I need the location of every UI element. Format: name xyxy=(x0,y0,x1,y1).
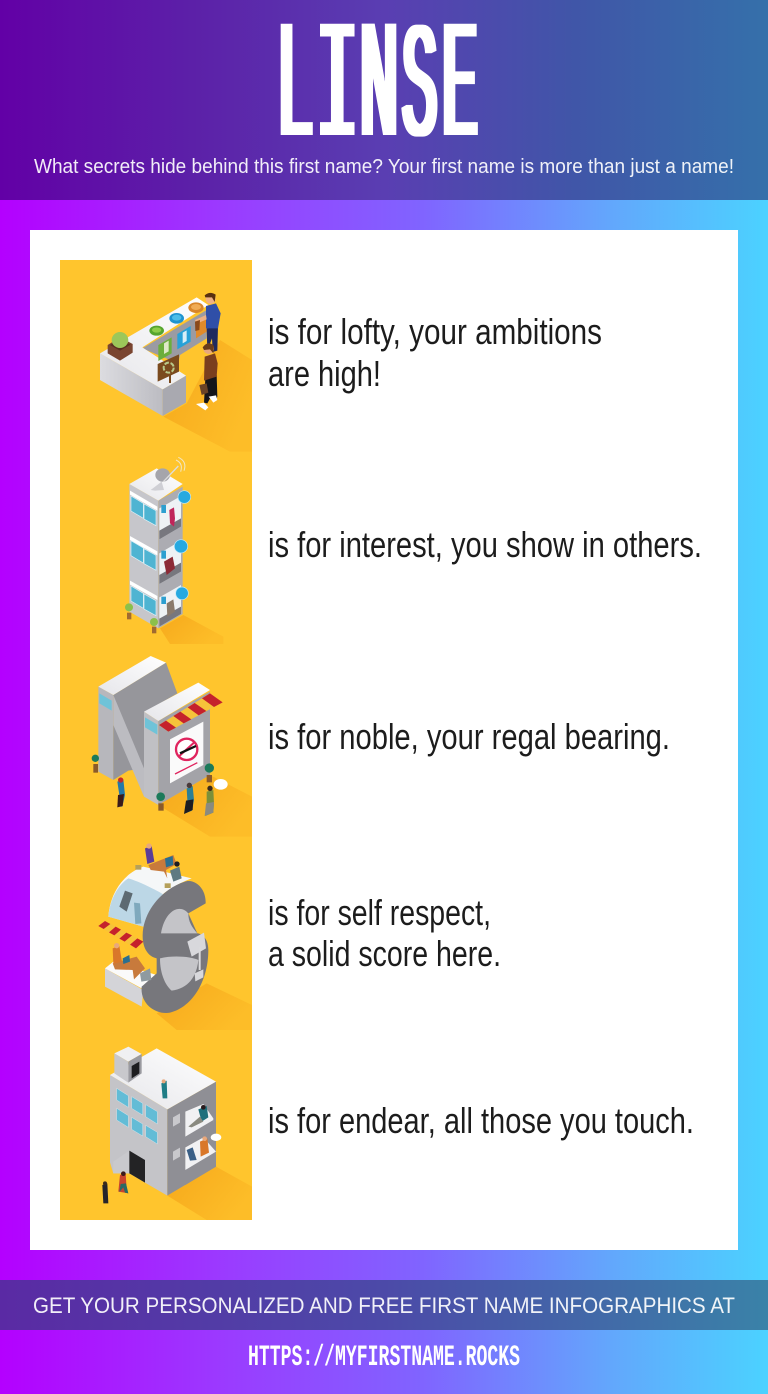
icon: letter I office tower xyxy=(125,457,223,644)
icon: letter N building xyxy=(92,656,252,837)
text: L line 2: are high! xyxy=(268,353,381,394)
text: L line: is for lofty, your ambitions xyxy=(268,311,602,352)
text: S line 2: a solid score here. xyxy=(268,933,501,974)
title: S xyxy=(402,0,437,186)
text: N line: is for noble, your regal bearing. xyxy=(268,716,670,757)
footer url: HTTPS://MYFIRSTNAME.ROCKS xyxy=(248,1341,520,1375)
header band xyxy=(0,0,768,200)
text: S line: is for self respect, xyxy=(268,892,491,933)
icon: letter S building xyxy=(98,843,252,1030)
icon: letter E building xyxy=(102,1047,252,1220)
title: N xyxy=(360,0,399,186)
icon: letter L recycling counter xyxy=(100,293,252,452)
yellow illustration column xyxy=(60,260,252,1220)
title: L xyxy=(276,0,314,187)
footer text: GET YOUR PERSONALIZED AND FREE FIRST NAME INFOGRAPHICS AT xyxy=(33,1293,735,1318)
subtitle: What secrets hide behind this first name? Your first name is more than just a name! xyxy=(34,156,734,178)
title xyxy=(276,0,478,187)
footer band xyxy=(0,1280,768,1330)
white content panel xyxy=(30,230,738,1250)
title: E xyxy=(442,0,478,187)
